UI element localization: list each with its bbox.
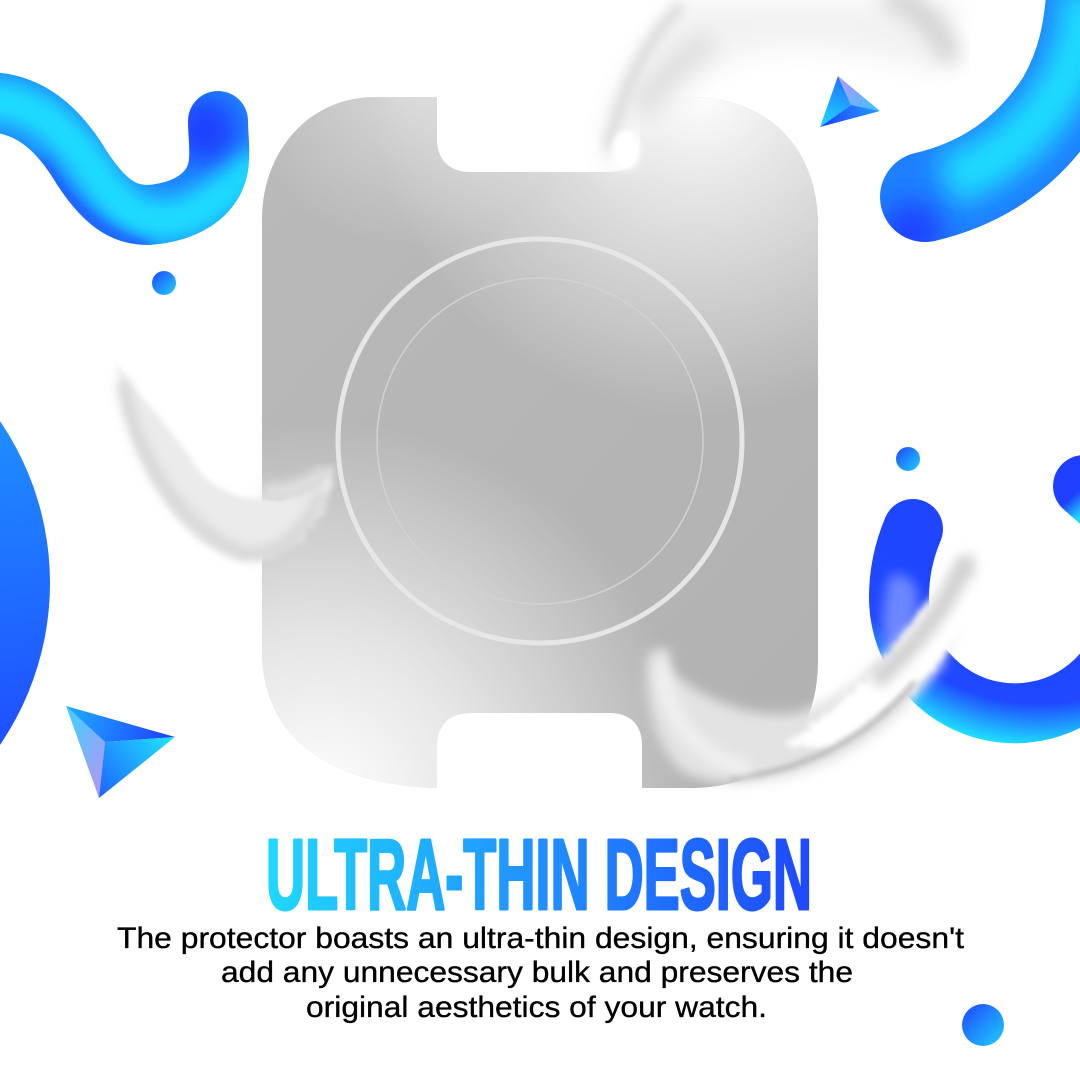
half circle: left edge bbox=[0, 296, 50, 870]
line 1: The protector boasts an ultra-thin design, ensuring it doesn't bbox=[117, 922, 965, 955]
inner ring bbox=[377, 278, 703, 604]
triangle: upper right bbox=[820, 76, 880, 127]
dot: middle right bbox=[896, 447, 920, 471]
panel: thin protector plate bbox=[262, 97, 818, 788]
blob: lower right ring bbox=[899, 529, 1080, 713]
feather: left bbox=[116, 362, 332, 562]
blob: upper right tube bbox=[880, 0, 1080, 242]
blob: top-left wavy tube bbox=[0, 72, 250, 245]
body text bbox=[117, 922, 965, 1024]
dot: bottom right bbox=[962, 1004, 1004, 1046]
line 3: original aesthetics of your watch. bbox=[306, 991, 767, 1024]
triangle: lower left bbox=[66, 706, 175, 798]
line 2: add any unnecessary bulk and preserves the bbox=[221, 956, 853, 989]
outer ring bbox=[338, 239, 742, 643]
feather: top bbox=[605, 0, 960, 170]
dot: upper left bbox=[152, 271, 176, 295]
feather: lower right bbox=[647, 548, 990, 784]
